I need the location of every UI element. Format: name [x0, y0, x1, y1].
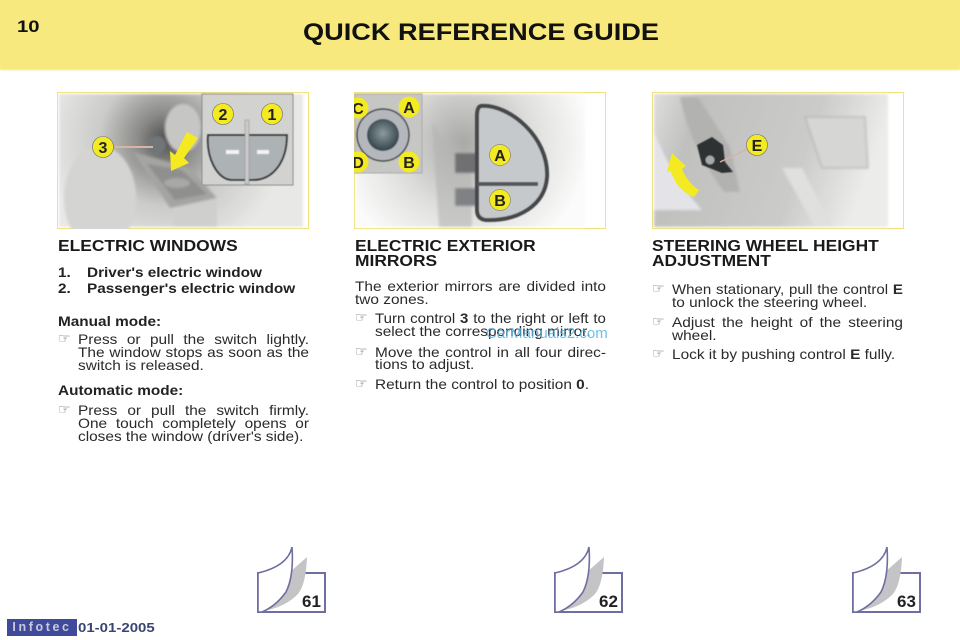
column 2: electric exterior mirrors: [355, 238, 606, 392]
step: move control: Move the control in all four direc-: [375, 344, 606, 360]
step: move control: ☞: [355, 344, 368, 360]
step: move control: [355, 344, 606, 372]
heading: [355, 238, 536, 270]
page reference icon 61: 61: [302, 592, 321, 611]
inset: switch close-up: [202, 94, 293, 185]
column 1: electric windows: [58, 238, 309, 444]
intro: The exterior mirrors are divided into: [355, 278, 606, 294]
page number: 10: [17, 17, 40, 36]
automatic mode: Press or pull the switch firmly.: [78, 402, 309, 418]
intro: [355, 278, 606, 307]
heading: STEERING WHEEL HEIGHT: [652, 238, 879, 255]
callout 2: 2: [219, 107, 228, 124]
callout 3: 3: [99, 140, 108, 157]
header band: [0, 0, 960, 69]
callout 1: [262, 104, 282, 124]
intro: two zones.: [355, 291, 429, 307]
manual mode: [58, 314, 309, 373]
callout A small: A: [403, 100, 415, 117]
manual mode: ☞: [58, 331, 71, 347]
manual mode: Manual mode:: [58, 314, 161, 329]
photo: window switches: [57, 92, 309, 229]
callout B small: [398, 152, 420, 172]
automatic mode: One touch completely opens or: [78, 415, 309, 431]
page reference icon 62: [554, 546, 623, 613]
callout E: E: [752, 138, 763, 155]
callout 2: [212, 104, 234, 124]
callout D: [348, 152, 368, 172]
automatic mode: [58, 383, 309, 444]
heading: ELECTRIC WINDOWS: [58, 238, 238, 255]
photo: mirror control: [354, 92, 606, 229]
yellow arrow: [667, 153, 699, 197]
step: adjust: [652, 314, 903, 343]
page reference icon 62: 62: [599, 592, 618, 611]
step: lock: Lock it by pushing control E fully.: [672, 346, 895, 362]
mirror body with zones: [477, 106, 547, 220]
page reference icon 61: [257, 546, 326, 613]
step: turn control: [355, 310, 606, 339]
numbered list: Driver's electric window: [87, 265, 262, 280]
footer logo: [7, 619, 77, 636]
watermark: CarManuals2.com: [486, 325, 608, 342]
heading: ADJUSTMENT: [652, 253, 771, 270]
inset: joystick: [355, 94, 422, 173]
step: return control: Return the control to position 0.: [375, 376, 589, 392]
step: unlock: [652, 281, 903, 310]
callout A: A: [494, 148, 506, 165]
step: adjust: wheel.: [672, 327, 717, 343]
step: turn control: select the corresponding mirror.: [375, 323, 591, 339]
step: unlock: ☞: [652, 281, 665, 297]
numbered list: 2.: [58, 281, 71, 296]
column 3: steering wheel height: [652, 238, 903, 362]
lever: [697, 137, 733, 173]
step: turn control: Turn control 3 to the right or left to: [375, 310, 606, 326]
manual mode: Press or pull the switch lightly.: [78, 331, 309, 347]
yellow arrow: [170, 132, 198, 171]
manual mode: switch is released.: [78, 357, 204, 373]
step: adjust: Adjust the height of the steering: [672, 314, 903, 330]
numbered list: 1.: [58, 265, 71, 280]
step: unlock: to unlock the steering wheel.: [672, 294, 867, 310]
page reference icon 63: 63: [897, 592, 916, 611]
callout 3: [92, 136, 153, 158]
automatic mode: Automatic mode:: [58, 383, 183, 398]
numbered list: Passenger's electric window: [87, 281, 295, 296]
callout E: [720, 134, 768, 162]
footer date: 01-01-2005: [78, 621, 155, 635]
step: adjust: ☞: [652, 314, 665, 330]
numbered list: [58, 265, 296, 296]
step: lock: ☞: [652, 346, 665, 362]
heading: ELECTRIC EXTERIOR: [355, 238, 536, 255]
heading: MIRRORS: [355, 253, 437, 270]
automatic mode: closes the window (driver's side).: [78, 428, 303, 444]
title: QUICK REFERENCE GUIDE: [303, 19, 659, 46]
automatic mode: ☞: [58, 402, 71, 418]
callout A small: [398, 96, 420, 118]
step: move control: tions to adjust.: [375, 356, 474, 372]
callout C: [348, 98, 368, 118]
callout A: [490, 144, 510, 166]
footer logo: Infotec: [12, 620, 72, 634]
callout B: B: [494, 193, 506, 210]
photo: steering wheel lever: [652, 92, 904, 229]
step: turn control: ☞: [355, 310, 368, 326]
heading: [652, 238, 879, 270]
callout B small: B: [403, 155, 415, 172]
manual mode: The window stops as soon as the: [78, 344, 309, 360]
page reference icon 63: [852, 546, 921, 613]
callout B: [490, 190, 510, 210]
callout 1: 1: [268, 107, 277, 124]
step: unlock: When stationary, pull the control E: [672, 281, 903, 297]
step: return control: ☞: [355, 376, 368, 392]
